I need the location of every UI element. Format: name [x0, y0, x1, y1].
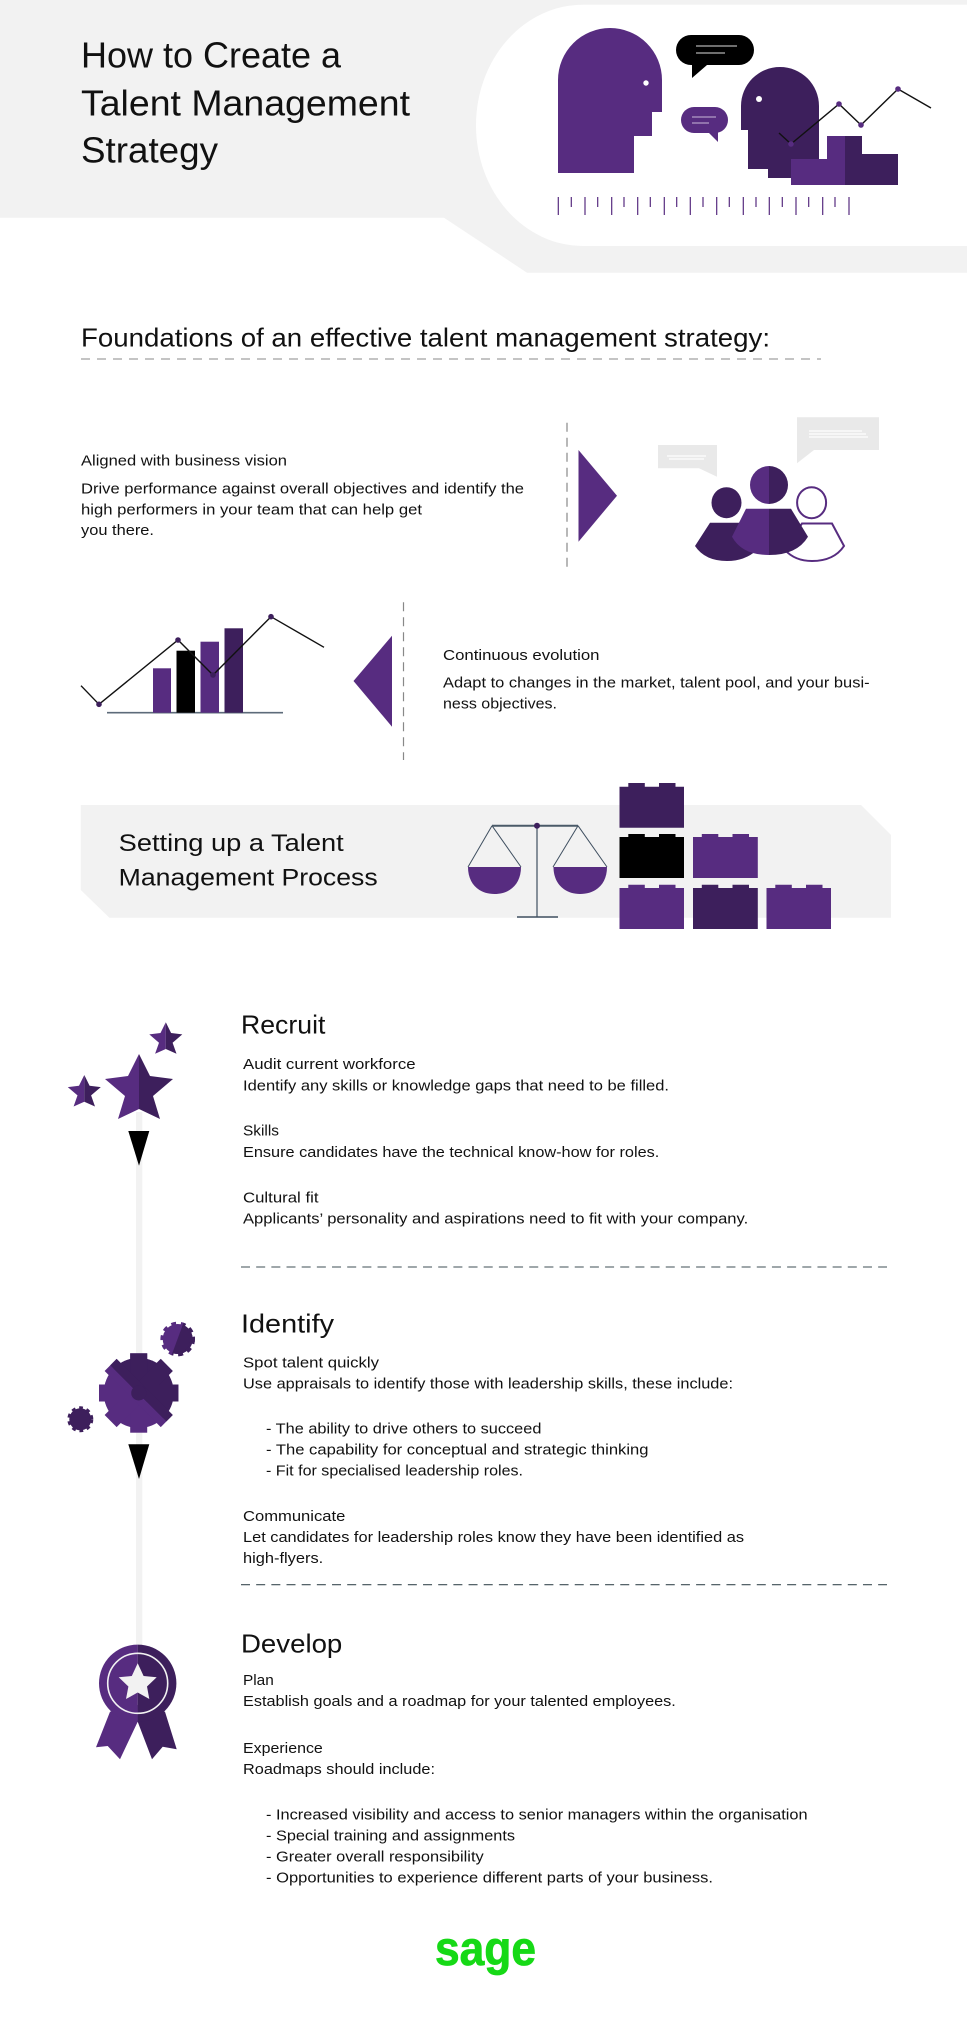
text: recruit: Ensure candidates have the technical know-how for roles. [243, 1144, 659, 1161]
ruler [558, 197, 849, 215]
text: continuous evolution: Continuous evolution [443, 647, 600, 664]
text: aligned with business vision: Drive performance against overall objectives and identify the [81, 480, 524, 497]
icon: award badge [96, 1645, 177, 1759]
text: develop: Roadmaps should include: [243, 1761, 435, 1778]
icon: building bricks [620, 783, 831, 929]
arrow down [128, 1131, 149, 1166]
heading [119, 830, 378, 892]
icon: stepped blocks [791, 136, 898, 185]
heading: Management Process [119, 865, 378, 892]
text: develop [241, 1629, 808, 1887]
person left [695, 487, 757, 561]
text: identify: - Fit for specialised leadership roles. [266, 1463, 523, 1480]
arrow down [128, 1444, 149, 1479]
text: develop: - Greater overall responsibility [266, 1849, 484, 1866]
text: identify: - The ability to drive others to succeed [266, 1421, 541, 1438]
bar and line chart [81, 614, 324, 713]
person right outline [785, 487, 844, 561]
text: identify: high-flyers. [243, 1550, 323, 1567]
text: recruit: Cultural fit [243, 1189, 319, 1206]
header illustration [558, 28, 931, 215]
text: identify: Spot talent quickly [243, 1354, 380, 1371]
text: develop: Establish goals and a roadmap for your talented employees. [243, 1693, 676, 1710]
panel: setting up process [81, 783, 891, 929]
text: aligned with business vision: Aligned with business vision [81, 453, 287, 470]
text: recruit [241, 1009, 748, 1228]
icon: small head [741, 67, 819, 178]
text: recruit: Audit current workforce [243, 1056, 416, 1073]
text: continuous evolution [443, 647, 870, 712]
text: identify: Communicate [243, 1508, 345, 1525]
person centre [732, 466, 808, 555]
bubble left [658, 445, 717, 477]
icon: stars [68, 1022, 182, 1119]
line chart [779, 86, 931, 147]
text: aligned with business vision: high performers in your team that can help get [81, 501, 423, 518]
icon: scales [468, 823, 607, 917]
text: aligned with business vision: you there. [81, 522, 154, 539]
title [81, 35, 410, 171]
text: identify [241, 1308, 744, 1567]
bubble right [797, 417, 879, 463]
icon: gears [69, 1324, 193, 1433]
vertical connector [136, 1112, 142, 1652]
title: Strategy [81, 130, 218, 171]
text: recruit: Applicants’ personality and aspirations need to fit with your company. [243, 1211, 748, 1228]
text: recruit: Skills [243, 1123, 279, 1140]
text: continuous evolution: Adapt to changes in the market, talent pool, and your busi- [443, 674, 870, 691]
divider with arrow right [567, 423, 617, 569]
text: develop: Experience [243, 1740, 323, 1757]
text: identify: Identify [241, 1308, 334, 1338]
text: identify: Let candidates for leadership roles know they have been identified as [243, 1529, 744, 1546]
header banner [0, 0, 967, 273]
logo: sage: sage [435, 1923, 536, 1976]
heading: Setting up a Talent [119, 830, 344, 857]
small gear top right [163, 1324, 193, 1354]
small gear bottom left [69, 1408, 91, 1430]
section heading: Foundations of an effective talent management strategy: [81, 323, 770, 353]
text: develop: - Special training and assignments [266, 1828, 515, 1845]
text: recruit: Recruit [241, 1009, 326, 1039]
text: identify: - The capability for conceptual and strategic thinking [266, 1442, 648, 1459]
text: identify: Use appraisals to identify those with leadership skills, these include: [243, 1375, 733, 1392]
icon: large head [558, 28, 662, 173]
text: aligned with business vision [81, 453, 524, 539]
ribbon [96, 1705, 177, 1759]
text: develop: - Increased visibility and access to senior managers within the organisation [266, 1807, 808, 1824]
icon: purple speech bubble [681, 107, 728, 142]
text: continuous evolution: ness objectives. [443, 695, 557, 712]
text: develop: - Opportunities to experience different parts of your business. [266, 1870, 713, 1887]
title: Talent Management [81, 82, 410, 123]
text: develop: Plan [243, 1672, 274, 1689]
text: recruit: Identify any skills or knowledge gaps that need to be filled. [243, 1077, 669, 1094]
text: develop: Develop [241, 1629, 342, 1659]
icon: black speech bubble [676, 35, 754, 78]
large gear [99, 1353, 178, 1433]
icon: team with speech bubbles [658, 417, 879, 561]
title: How to Create a [81, 35, 342, 76]
divider with arrow left [354, 602, 404, 760]
